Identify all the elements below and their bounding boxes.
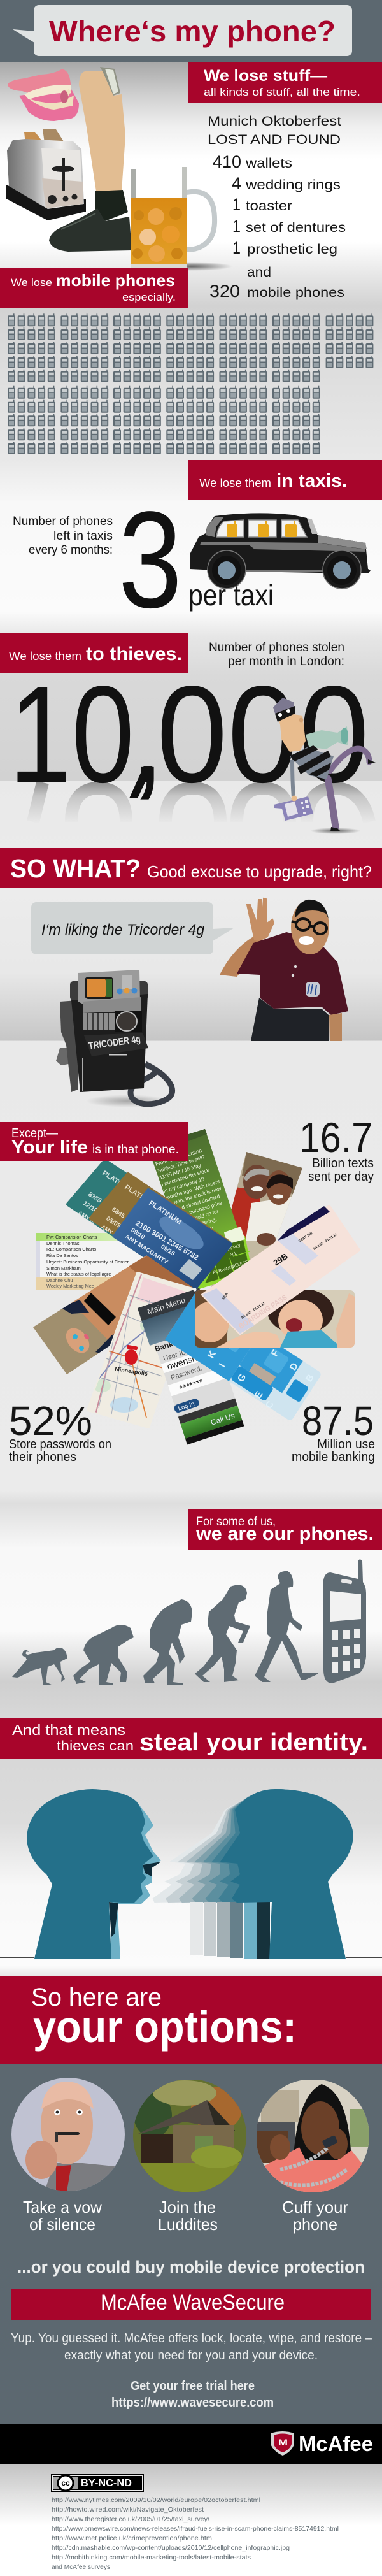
text block: free trial	[111, 2379, 274, 2410]
icon: beer mug	[131, 162, 232, 271]
card: email message: FORWARD	[213, 1265, 235, 1276]
header panel: Where's my phone	[0, 0, 382, 62]
card: brown credit card: AMY M	[100, 1223, 119, 1239]
photo: woman chained to phone	[257, 2080, 371, 2193]
option: join the Luddites	[133, 2080, 246, 2234]
heading: buy mobile device protection: ...or you could buy mobile device protection	[17, 2257, 365, 2277]
silhouette: early human with stone tool	[195, 1585, 250, 1682]
tab letters: C	[264, 1399, 276, 1411]
icon: thief holding phone	[273, 698, 376, 834]
photo: cabin in woods	[133, 2080, 246, 2195]
yellow phones in windows	[227, 521, 297, 537]
card: brown credit card	[91, 1174, 229, 1284]
text block: product description: Yup. You guessed it. McAfee offers lock, locate, wipe, and restore –	[11, 2331, 372, 2345]
option: cuff your phone: phone	[293, 2215, 337, 2234]
card: mobile banking screen: Password:	[170, 1365, 203, 1382]
tab letters: E	[253, 1390, 265, 1400]
card: mobile banking screen: User ID:	[162, 1348, 189, 1363]
panel: McAfee logo band	[0, 2424, 382, 2464]
bag	[306, 726, 348, 749]
panel: Except your life is in that phone: Your life	[11, 1137, 88, 1158]
text block: source links: http://www.nytimes.com/2009/10/02/world/europe/02octoberfest.html	[52, 2496, 260, 2504]
speech bubble: Tricorder	[31, 902, 234, 954]
option: vow of silence	[11, 2078, 125, 2234]
icon: large mobile phone	[323, 1559, 366, 1683]
panel: we are our phones: For some of us,	[196, 1515, 276, 1529]
card: brown credit card: 05/09	[104, 1215, 122, 1230]
badge: Creative Commons BY-NC-ND: BY-NC-ND	[81, 2478, 132, 2489]
card: email inbox list: Simon Markham	[46, 1265, 81, 1271]
card: blue credit card: 09/15	[159, 1243, 176, 1258]
card: teal credit card: PLATINUM	[101, 1169, 135, 1195]
card: teal credit card	[68, 1161, 210, 1274]
head	[275, 712, 306, 752]
chart: 320 phone icons pictogram	[8, 313, 373, 454]
title: Where‘s my phone?	[49, 15, 336, 48]
text block: Munich Oktoberfest lost and found list: 1	[232, 195, 241, 214]
identity-theft motion trail	[138, 1789, 286, 1959]
badge: Creative Commons BY-NC-ND: cc	[61, 2479, 70, 2487]
option: cuff your phone	[257, 2080, 371, 2234]
card: blue credit card: AMY MACDARTY	[124, 1233, 169, 1266]
panel: we are our phones	[188, 1509, 382, 1550]
text block: Munich Oktoberfest lost and found list: toaster	[246, 199, 292, 213]
top silver panel	[78, 970, 140, 1005]
speech bubble: Tricorder: I‘m liking the Tricorder 4g	[41, 921, 205, 939]
text block: Munich Oktoberfest lost and found list: 1	[232, 238, 241, 257]
card: teal credit card: AMY M	[77, 1209, 96, 1225]
panel: We lose them in taxis: We lose them	[199, 477, 271, 489]
stat: 87.5 million use mobile banking: Million use	[317, 1437, 375, 1451]
silhouette: chimp	[73, 1625, 134, 1685]
card: email message: REPLY	[227, 1244, 242, 1252]
panel: Except your life is in that phone: Except—	[11, 1126, 58, 1140]
card: email message: consequences.	[181, 1239, 216, 1255]
shoe	[49, 208, 132, 252]
card: email inbox list: Urgent: Business Opportunity at Confer	[46, 1259, 129, 1265]
card: email message: 11:25 AM / 16 May	[159, 1162, 202, 1181]
panel: So what banner	[0, 848, 382, 888]
card: email inbox list: Rita De Santos	[46, 1253, 78, 1258]
card: mobile banking screen: Log In	[177, 1400, 195, 1413]
tab letters: D	[288, 1361, 301, 1372]
text block: source links: http://www.prnewswire.com/news-releases/ifraud-fuels-rise-in-scam-phone-claims-85174912.html	[52, 2525, 339, 2533]
card: mobile banking screen: Call Us	[209, 1411, 236, 1427]
icon: McAfee shield	[271, 2431, 294, 2456]
panel: So here are your options	[0, 1976, 382, 2064]
big number 3: 3	[118, 482, 182, 637]
card: map with pin	[88, 1273, 195, 1427]
silhouette: stooped ape-man	[143, 1599, 192, 1685]
text block: phones stolen per month	[209, 641, 344, 668]
card: email message: growth, the stock is now	[167, 1186, 222, 1207]
reflection of big number	[33, 782, 369, 822]
text: per taxi: per taxi	[188, 579, 274, 612]
text block: phones left in taxis: left in taxis	[53, 529, 113, 543]
panel: We lose mobile phones especially: especially.	[122, 291, 176, 303]
map pin	[125, 1345, 138, 1365]
card: boarding pass: 29B	[271, 1251, 290, 1268]
card: mobile banking screen: owensn	[166, 1353, 198, 1372]
big number 10,000: 10	[9, 657, 134, 811]
tab letters: G	[236, 1372, 248, 1384]
stat: 16.7 billion texts: Billion texts	[312, 1156, 374, 1170]
stolen phone	[274, 796, 313, 821]
panel: We lose them to thieves	[0, 633, 188, 673]
text block: free trial: https://www.wavesecure.com	[111, 2396, 274, 2410]
shirt	[237, 932, 348, 1015]
card: blue credit card	[115, 1190, 230, 1288]
icon: prosthetic leg	[49, 67, 132, 252]
badge: Creative Commons BY-NC-ND	[51, 2474, 144, 2492]
option: cuff your phone: Cuff your	[282, 2198, 348, 2217]
angled label	[84, 1033, 148, 1056]
card: blue credit card: 2100 3001 2345 6782	[134, 1220, 199, 1262]
card: boarding pass: A4 182 · 01.21.11	[241, 1302, 266, 1320]
photo: man zipping mouth	[11, 2078, 125, 2191]
panel: So what banner: Good excuse to upgrade, right?	[147, 862, 372, 881]
card: email message: the public offering,	[175, 1216, 218, 1234]
icon: Tricorder 4g device: TRICODER 4g	[88, 1034, 141, 1052]
card: mobile banking screen: Main Menu	[146, 1295, 187, 1316]
text block: Munich Oktoberfest lost and found list: set of dentures	[246, 220, 346, 235]
body	[60, 1000, 78, 1092]
text block: source links	[52, 2496, 339, 2571]
card: email inbox list	[36, 1233, 150, 1290]
text block: Munich Oktoberfest lost and found list: prosthetic leg	[247, 242, 337, 257]
panel: Except your life is in that phone	[0, 1122, 188, 1161]
right forearm	[329, 1013, 342, 1041]
arm and hand	[220, 937, 267, 977]
legs	[328, 779, 336, 827]
text block: Munich Oktoberfest lost and found list: 320	[209, 282, 240, 301]
text block: Munich Oktoberfest lost and found list: 410	[213, 152, 241, 171]
card: email message: to hold or sell –	[180, 1232, 215, 1248]
card: email message: ALL	[229, 1251, 237, 1258]
text block: Munich Oktoberfest lost and found list	[208, 114, 346, 301]
speech bubble	[13, 5, 352, 56]
tab letters: F	[269, 1348, 281, 1358]
option: vow of silence: Take a vow	[23, 2198, 102, 2217]
panel: So here are your options: So here are	[31, 1983, 162, 2011]
floor slits	[0, 1957, 34, 1958]
callout: McAfee WaveSecure	[11, 2289, 371, 2320]
left head	[27, 1789, 161, 1959]
card: email inbox list: Daphne Chu	[46, 1277, 73, 1283]
text block: product description: exactly what you need for you and your device.	[64, 2349, 318, 2363]
text block: Munich Oktoberfest lost and found list: Munich Oktoberfest	[208, 114, 341, 129]
card: boarding pass: A4 182 · 01.21.11	[313, 1233, 338, 1251]
stat: 16.7 billion texts: 16.7	[299, 1114, 372, 1161]
chart: evolution of man into phone silhouettes	[12, 1559, 366, 1685]
silhouette: walking human	[255, 1571, 318, 1682]
card: mother and daughter photo	[191, 1288, 355, 1348]
stat: 52% store passwords	[9, 1398, 111, 1464]
trousers	[251, 998, 322, 1041]
card: email inbox list: Weekly Marketing Mee	[46, 1283, 94, 1289]
icon: McAfee shield: M	[278, 2437, 288, 2447]
text block: source links: http://www.theregister.co.uk/2005/01/25/taxi_survey/	[52, 2515, 209, 2523]
card: blue file tabs	[165, 1292, 322, 1421]
card: teal credit card: 8385	[87, 1191, 103, 1205]
card: email message: but the decision	[177, 1225, 214, 1241]
text block: free trial: Get your free trial here	[131, 2379, 255, 2393]
silhouette: monkey	[12, 1648, 67, 1685]
icon: Tricorder 4g device	[56, 970, 173, 1107]
card: email message	[148, 1129, 252, 1290]
card: email inbox list: RE: Comparison Charts	[46, 1246, 96, 1252]
icon: black taxi with phones	[190, 513, 371, 589]
right head	[220, 1789, 353, 1959]
card: email message: From: John Thurston	[155, 1148, 203, 1167]
panel: We lose mobile phones especially: mobile phones	[56, 271, 175, 290]
panel: We lose stuff: We lose stuff—	[204, 67, 327, 85]
wordmark: McAfee	[299, 2432, 373, 2456]
card: email message: I purchased the stock	[161, 1167, 211, 1187]
option: join the Luddites: Luddites	[158, 2215, 218, 2234]
infographic fan of personal items	[33, 1129, 359, 1446]
panel: thieves can steal your identity	[0, 1718, 382, 1759]
text block: phones stolen per month: Number of phones stolen	[209, 641, 344, 654]
tab letters: B	[304, 1372, 316, 1384]
panel: We lose them in taxis: in taxis.	[276, 471, 347, 491]
panel: thieves can steal your identity: steal your identity.	[139, 1729, 368, 1756]
card: couple photo	[211, 1152, 302, 1287]
card: boarding pass: SEAT 29b	[298, 1232, 314, 1244]
panel: We lose them to thieves: to thieves.	[86, 644, 182, 665]
text block: Munich Oktoberfest lost and found list: LOST AND FOUND	[208, 133, 341, 147]
text block: Munich Oktoberfest lost and found list: and	[247, 265, 271, 280]
wheels	[208, 550, 361, 589]
stat: 52% store passwords: Store passwords on	[9, 1437, 111, 1451]
card: boarding pass: BOARDING PASS	[237, 1293, 289, 1331]
text block: phones left in taxis: every 6 months:	[29, 543, 113, 557]
text block: product description	[11, 2331, 372, 2363]
text block: source links: http://mobithinking.com/mobile-marketing-tools/latest-mobile-stats	[52, 2554, 251, 2561]
callout: McAfee WaveSecure: McAfee WaveSecure	[101, 2291, 285, 2315]
big number 10,000: ,	[128, 657, 166, 811]
option: vow of silence: of silence	[29, 2215, 96, 2234]
card: blue credit card: PLATINUM	[147, 1199, 183, 1226]
icon: toaster	[6, 129, 86, 220]
text block: Munich Oktoberfest lost and found list: wallets	[245, 156, 292, 171]
stat: 87.5 million use mobile banking: 87.5	[302, 1398, 374, 1444]
card: email message: valued almost doubled	[169, 1193, 221, 1214]
option: join the Luddites: Join the	[159, 2198, 216, 2217]
striped body	[290, 747, 334, 779]
card: mobile banking screen: Banking	[153, 1335, 185, 1353]
panel: Except your life is in that phone: is in that phone.	[92, 1143, 179, 1156]
card: mobile banking screen	[138, 1288, 244, 1446]
panel: So what banner: SO WHAT?	[10, 854, 141, 883]
panel: We lose mobile phones especially: We lose	[11, 277, 52, 289]
card: teal credit card: 12/10	[81, 1200, 99, 1214]
card: mobile banking screen: *******	[178, 1376, 205, 1393]
windows	[216, 520, 307, 537]
sock	[95, 190, 128, 221]
text block: source links: http://cdn.mashable.com/wp-content/uploads/2010/12/cellphone_infographic.jpg	[52, 2544, 290, 2552]
text block: source links: and McAfee surveys	[52, 2563, 110, 2571]
card: map with pin: Minneapolis	[115, 1365, 148, 1377]
panel: thieves can steal your identity: thieves can	[57, 1739, 134, 1753]
stat: 87.5 million use mobile banking: mobile banking	[292, 1450, 375, 1464]
text block: Munich Oktoberfest lost and found list: mobile phones	[247, 285, 344, 300]
stat: 52% store passwords: 52%	[9, 1398, 92, 1444]
card: email message: Subject: Time to sell?	[157, 1154, 206, 1174]
card: blue credit card: 09/10	[129, 1227, 146, 1241]
arm	[292, 760, 294, 798]
big number 10,000: 000	[157, 657, 369, 811]
text block: phones stolen per month: per month in London:	[228, 655, 344, 668]
panel: options	[0, 2064, 382, 2424]
illustration: two keyhole heads	[0, 1789, 382, 1959]
silver mid band	[83, 997, 141, 1013]
card: woman photo with censor bar	[33, 1255, 195, 1374]
card: email message: I'd like to hold on for	[173, 1209, 220, 1228]
text block: Munich Oktoberfest lost and found list: wedding rings	[245, 178, 341, 192]
panel: We lose stuff	[188, 62, 382, 103]
icon: man giving Vulcan salute	[220, 898, 348, 1041]
text block: phones left in taxis: Number of phones	[13, 515, 113, 528]
illustration: lost objects	[6, 67, 232, 271]
card: email message: over its purchase price.	[171, 1200, 224, 1221]
card: email inbox list: Dennis Thomas	[46, 1241, 80, 1246]
stat: 16.7 billion texts	[299, 1114, 374, 1184]
card: brown credit card: PLATINUM	[123, 1183, 157, 1209]
big number 10,000	[9, 657, 369, 811]
card: email message: DELETE	[232, 1260, 249, 1269]
panel: thieves can steal your identity: And that means	[12, 1722, 125, 1738]
card: email inbox list: Fw: Comparision Charts	[46, 1234, 97, 1240]
panel: We lose them in taxis	[188, 460, 382, 500]
strap	[131, 1064, 173, 1104]
head	[291, 900, 329, 954]
tab letters	[206, 1348, 316, 1411]
card: boarding pass	[202, 1206, 359, 1334]
text block: source links: http://www.met.police.uk/crimeprevention/phone.htm	[52, 2535, 212, 2542]
text block: source links: http://howto.wired.com/wiki/Navigate_Oktoberfest	[52, 2506, 204, 2514]
text block: Munich Oktoberfest lost and found list: 4	[232, 174, 241, 193]
card: email message: in my company 18	[163, 1176, 205, 1194]
panel: We lose them to thieves: We lose them	[9, 650, 81, 663]
panel: We lose mobile phones especially	[0, 268, 188, 308]
panel: we are our phones: we are our phones.	[195, 1523, 374, 1544]
panel: sources footer	[0, 2464, 382, 2576]
panel: So here are your options: your options:	[33, 2002, 297, 2052]
glasses	[292, 919, 327, 934]
stat: 52% store passwords: their phones	[9, 1450, 76, 1464]
stat: 16.7 billion texts: sent per day	[308, 1170, 374, 1184]
card: email message: months ago. With recent	[165, 1179, 221, 1201]
panel: We lose stuff: all kinds of stuff, all the time.	[204, 86, 360, 98]
icon: dentures	[8, 69, 79, 121]
text block: phones left in taxis	[13, 515, 113, 557]
card: boarding pass: SEA	[222, 1292, 229, 1300]
text block: Munich Oktoberfest lost and found list: 1	[232, 217, 241, 236]
tab letters: I	[217, 1362, 228, 1369]
tab letters: K	[206, 1349, 218, 1360]
card: email inbox list: What is the status of legal agre	[46, 1271, 111, 1277]
card: brown credit card: 6845	[110, 1206, 126, 1220]
stat: 87.5 million use mobile banking	[292, 1398, 375, 1464]
